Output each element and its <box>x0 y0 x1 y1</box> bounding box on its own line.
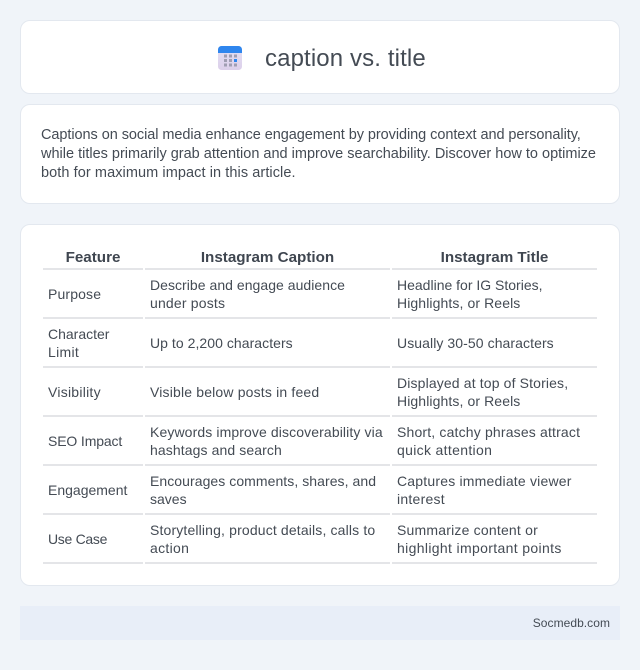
row: purpose: Headline for IG Stories, <box>397 277 543 293</box>
row: character limit: Up to 2,200 characters <box>150 335 293 351</box>
panel: title card <box>20 20 620 94</box>
icon: calendar <box>218 46 242 70</box>
row: visibility: Visible below posts in feed <box>150 384 319 400</box>
row: use case: highlight important points <box>397 540 562 556</box>
row: purpose: under posts <box>150 295 225 311</box>
row: character limit: Limit <box>48 344 79 360</box>
row: visibility: Visibility <box>48 384 101 400</box>
intro paragraph <box>41 127 596 181</box>
row: use case: Use Case <box>48 531 107 547</box>
row: engagement: Encourages comments, shares, and <box>150 473 376 489</box>
row: SEO impact: hashtags and search <box>150 442 282 458</box>
intro paragraph: Captions on social media enhance engagement by providing context and personality, <box>41 127 581 143</box>
row: use case: Summarize content or <box>397 522 538 538</box>
row: purpose: Highlights, or Reels <box>397 295 520 311</box>
intro paragraph: while titles primarily grab attention and improve searchability. Discover how to optimize <box>41 146 596 162</box>
row: SEO impact: quick attention <box>397 442 492 458</box>
row: SEO impact: Short, catchy phrases attract <box>397 424 580 440</box>
table header: Feature <box>66 249 120 266</box>
table header: Instagram Caption <box>201 249 334 266</box>
row: character limit <box>48 326 554 360</box>
row: SEO impact: SEO Impact <box>48 433 122 449</box>
row: visibility: Highlights, or Reels <box>397 393 520 409</box>
row: visibility <box>48 375 568 409</box>
row: purpose: Describe and engage audience <box>150 277 345 293</box>
row: purpose: Purpose <box>48 286 101 302</box>
footer bar <box>20 606 620 640</box>
row: engagement: Captures immediate viewer <box>397 473 572 489</box>
row: SEO impact: Keywords improve discoverability via <box>150 424 383 440</box>
row: engagement: interest <box>397 491 445 507</box>
row: use case: action <box>150 540 189 556</box>
row: SEO impact <box>48 424 580 458</box>
footer credit: Socmedb.com <box>533 616 610 630</box>
row: engagement: Engagement <box>48 482 127 498</box>
row: visibility: Displayed at top of Stories, <box>397 375 568 391</box>
row: use case <box>48 522 562 556</box>
row: character limit: Usually 30-50 characters <box>397 335 554 351</box>
row: purpose <box>48 277 543 311</box>
intro paragraph: both for maximum impact in this article. <box>41 165 296 181</box>
title: caption vs. title <box>265 45 426 72</box>
row: engagement <box>48 473 572 507</box>
panel: intro text <box>20 104 620 204</box>
panel: comparison table <box>20 224 620 586</box>
row: engagement: saves <box>150 491 187 507</box>
table header: Instagram Title <box>441 249 548 266</box>
row: use case: Storytelling, product details, calls to <box>150 522 375 538</box>
table header <box>66 249 548 266</box>
row: character limit: Character <box>48 326 109 342</box>
